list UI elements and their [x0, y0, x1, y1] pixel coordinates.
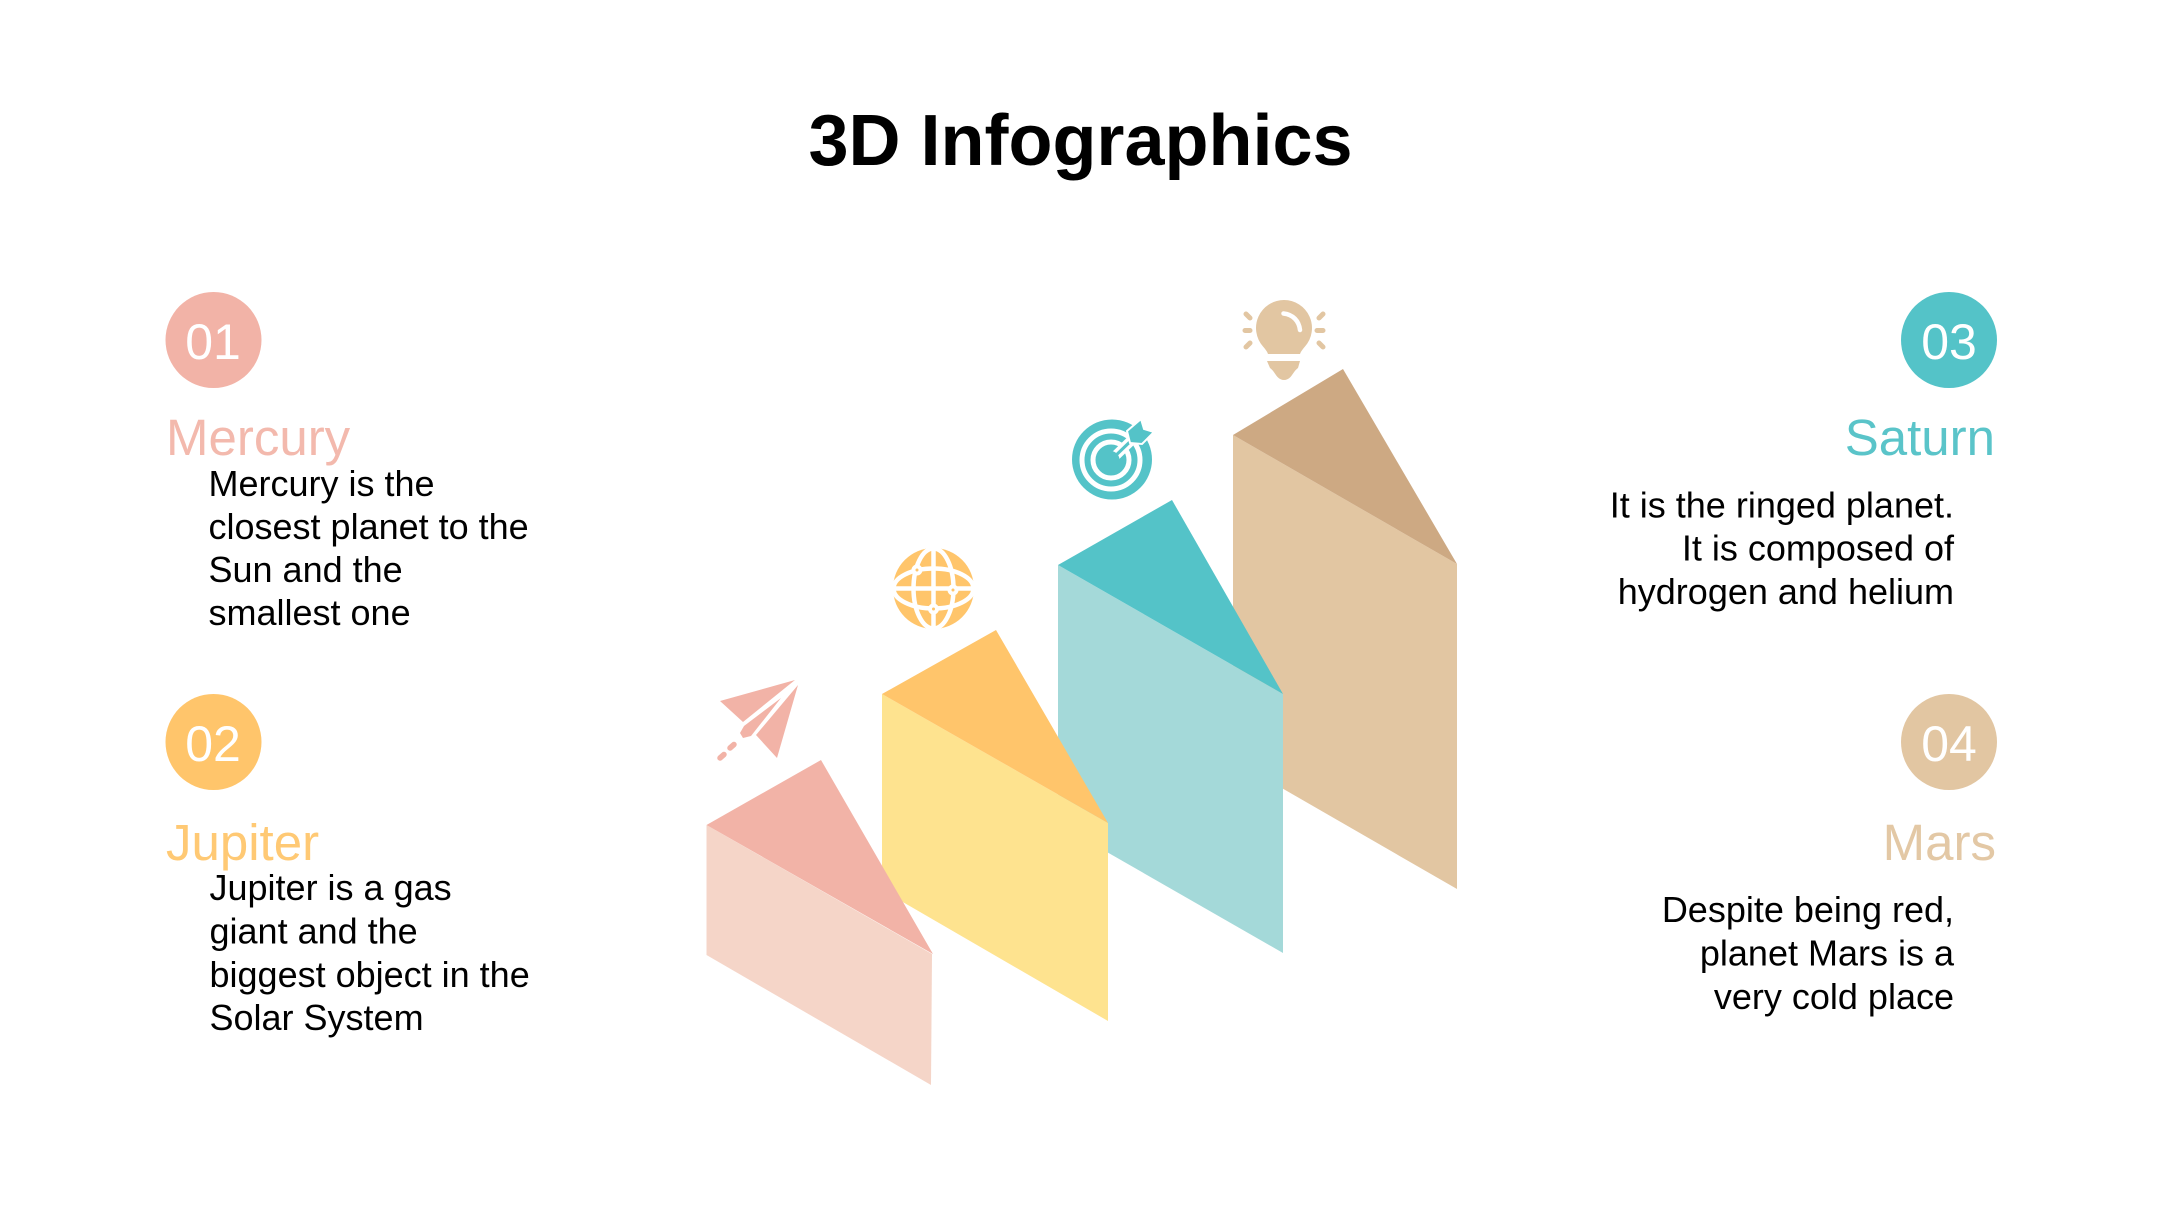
text: Mercury description: closest planet to the: [208, 506, 529, 547]
step 4: tan: [1233, 369, 1457, 889]
badge 03: [1901, 292, 1997, 388]
heading: Saturn: Saturn: [1845, 409, 1995, 466]
badge 03: 03: [1921, 314, 1977, 370]
panel: Saturn: [1610, 292, 1997, 612]
badge 02: [166, 694, 262, 790]
text: Jupiter description: Jupiter is a gas: [210, 867, 452, 908]
title: 3D Infographics: [808, 101, 1353, 181]
chart: isometric steps: [706, 369, 1457, 1085]
panel: Mars: [1662, 694, 1997, 1017]
text: Jupiter description: biggest object in the: [210, 954, 530, 995]
step 3: teal: [1058, 500, 1283, 953]
panel: Mercury: [166, 292, 529, 633]
heading: Mercury: Mercury: [166, 409, 351, 466]
text: Saturn description: It is the ringed planet.: [1610, 484, 1954, 526]
icon: light bulb: [1245, 300, 1323, 380]
panel: Jupiter: [166, 694, 530, 1038]
badge 02: 02: [185, 716, 241, 772]
text: Saturn description: It is composed of: [1682, 528, 1955, 568]
heading: Mars: Mars: [1883, 814, 1996, 871]
text: Mars description: very cold place: [1714, 976, 1954, 1017]
icon: paper plane: [720, 680, 798, 758]
badge 01: [166, 292, 262, 388]
badge 04: [1901, 694, 1997, 790]
badge 01: 01: [185, 314, 241, 370]
text: Mercury description: Mercury is the: [208, 463, 435, 504]
text: Mercury description: Sun and the: [208, 549, 403, 590]
text: Saturn description: hydrogen and helium: [1618, 571, 1954, 612]
text: Mars description: planet Mars is a: [1700, 932, 1955, 974]
badge 04: 04: [1921, 716, 1977, 772]
text: Jupiter description: giant and the: [210, 910, 418, 952]
heading: Jupiter: Jupiter: [166, 814, 319, 871]
step 2: yellow: [882, 630, 1108, 1021]
text: Jupiter description: Solar System: [210, 997, 424, 1038]
step 1: pink: [706, 760, 933, 1085]
icon: target with arrow: [1072, 419, 1154, 500]
text: Mercury description: smallest one: [208, 592, 411, 633]
text: Mars description: Despite being red,: [1662, 889, 1954, 930]
icon: globe: [893, 548, 974, 629]
